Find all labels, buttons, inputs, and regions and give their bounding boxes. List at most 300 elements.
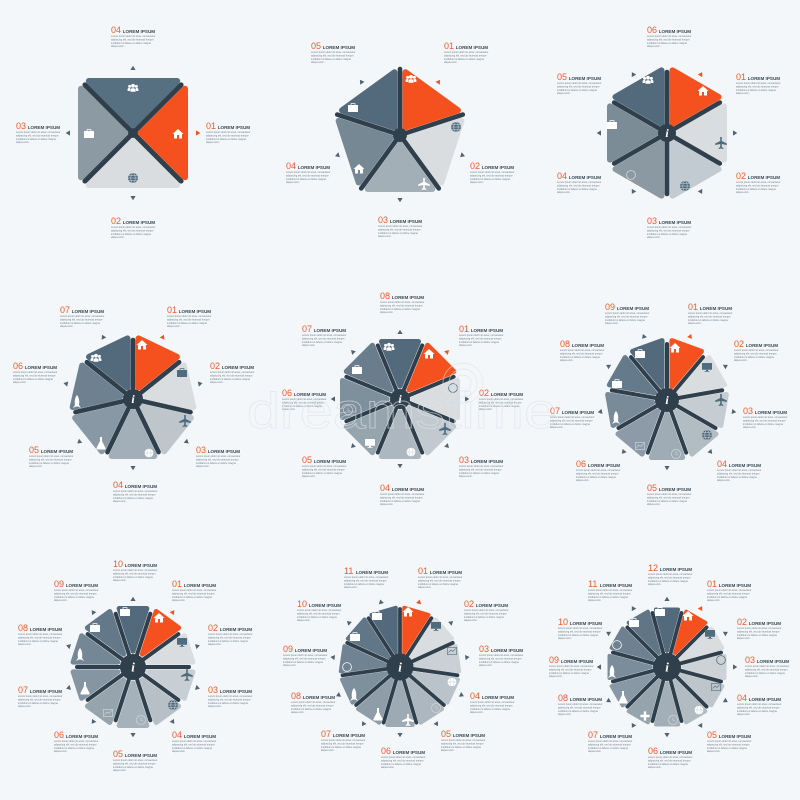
label 03: adipiscing elit, sed do eiusmod tempor [378,228,421,231]
icon: briefcase [177,369,187,377]
label 04: Lorem ipsum dolor sit amet, consectetur [717,469,762,472]
label 03: 03 [196,445,206,455]
label 05: aliqua enim. [707,750,721,753]
icon: people [128,84,138,92]
label 08 [558,693,603,716]
label 01: LOREM IPSUM [184,583,216,588]
label 01: incididunt ut labore et dolore magna [707,596,747,599]
label 05: aliqua enim. [557,92,571,95]
icon: ring [449,384,457,392]
label 06 [576,459,621,482]
label 06: 06 [54,730,64,740]
label 04: incididunt ut labore et dolore magna [113,497,153,500]
label 05: Lorem ipsum dolor sit amet, consectetur [113,759,158,762]
label 07: incididunt ut labore et dolore magna [588,747,628,750]
icon: rocket [73,395,81,408]
icon: home [354,164,364,174]
label 08: incididunt ut labore et dolore magna [380,308,420,311]
label 05: incididunt ut labore et dolore magna [302,472,342,475]
label 04: 04 [470,691,480,701]
label 06: Lorem ipsum dolor sit amet, consectetur [54,740,99,743]
label 09: incididunt ut labore et dolore magna [54,596,94,599]
label 03: LOREM IPSUM [755,410,787,415]
label 01: Lorem ipsum dolor sit amet, consectetur [418,576,463,579]
label 03 [208,685,253,708]
label 05: Lorem ipsum dolor sit amet, consectetur [707,740,752,743]
chart: 12 segments [549,563,790,769]
label 02: adipiscing elit, sed do eiusmod tempor [210,374,253,377]
label 07: aliqua enim. [18,705,32,708]
label 05: incididunt ut labore et dolore magna [647,500,687,503]
diagram: heptagon [63,334,203,470]
label 04: LOREM IPSUM [392,487,424,492]
label 02: 02 [737,617,747,627]
label 07: aliqua enim. [321,749,335,752]
label 11: LOREM IPSUM [356,570,388,575]
label 03: LOREM IPSUM [28,125,60,130]
label 11: aliqua enim. [344,586,358,589]
label 09: aliqua enim. [283,664,297,667]
icon: briefcase [348,104,358,112]
label 02: LOREM IPSUM [491,392,523,397]
label 04 [286,161,331,184]
label 12: LOREM IPSUM [660,567,692,572]
label 10 [113,559,158,582]
label 03: 03 [745,655,755,665]
label 07: Lorem ipsum dolor sit amet, consectetur [321,739,366,742]
label 03: aliqua enim. [16,141,30,144]
label 02: incididunt ut labore et dolore magna [464,616,504,619]
label 04: adipiscing elit, sed do eiusmod tempor [557,184,600,187]
label 11 [588,579,633,602]
label 08: 08 [291,691,301,701]
arrows [65,597,201,737]
label 03: incididunt ut labore et dolore magna [459,472,499,475]
label 11: incididunt ut labore et dolore magna [344,583,384,586]
label 06: incididunt ut labore et dolore magna [576,476,616,479]
label 11: adipiscing elit, sed do eiusmod tempor [588,592,631,595]
label 10: 10 [558,617,568,627]
label 07 [321,729,366,752]
label 02: LOREM IPSUM [220,627,252,632]
label 02: 02 [208,623,218,633]
chart: 11 segments [283,566,524,769]
icon: clock [431,703,441,713]
spokes and hub [614,72,720,194]
label 08: incididunt ut labore et dolore magna [560,356,600,359]
label 06: aliqua enim. [54,750,68,753]
label 06: Lorem ipsum dolor sit amet, consectetur [647,35,692,38]
label 02: aliqua enim. [737,637,751,640]
label 09: LOREM IPSUM [295,648,327,653]
label 01: adipiscing elit, sed do eiusmod tempor [459,337,502,340]
label 03 [647,216,692,239]
label 04: incididunt ut labore et dolore magna [557,188,597,191]
label 10: aliqua enim. [113,579,127,582]
label 01 [444,41,489,64]
label 03 [16,121,61,144]
label 08: adipiscing elit, sed do eiusmod tempor [291,704,334,707]
icon: briefcase [612,380,622,388]
label 04: incididunt ut labore et dolore magna [172,747,212,750]
label 08: aliqua enim. [380,311,394,314]
label 02: Lorem ipsum dolor sit amet, consectetur [111,226,156,229]
label 04: aliqua enim. [380,503,394,506]
segments [342,342,458,456]
label 02 [470,161,515,184]
label 09: LOREM IPSUM [66,583,98,588]
label 05: Lorem ipsum dolor sit amet, consectetur [302,465,347,468]
label 06: LOREM IPSUM [660,750,692,755]
label 07: 07 [588,730,598,740]
label 01: aliqua enim. [459,344,473,347]
label 09: 09 [549,655,559,665]
label 04: adipiscing elit, sed do eiusmod tempor [470,704,513,707]
label 05: 05 [302,455,312,465]
icon: briefcase [90,624,100,632]
label 11: aliqua enim. [588,599,602,602]
label 03: aliqua enim. [743,426,757,429]
label 03: adipiscing elit, sed do eiusmod tempor [208,698,251,701]
label 05: 05 [441,729,451,739]
label 07: LOREM IPSUM [72,309,104,314]
label 08: Lorem ipsum dolor sit amet, consectetur [291,701,336,704]
label 08: 08 [558,693,568,703]
label 05: aliqua enim. [113,769,127,772]
label 05: aliqua enim. [302,475,316,478]
label 01 [459,324,504,347]
label 07: 07 [321,729,331,739]
label 02: incididunt ut labore et dolore magna [737,634,777,637]
label 05: incididunt ut labore et dolore magna [557,89,597,92]
label 03: aliqua enim. [208,705,222,708]
spokes and hub [612,344,722,453]
label 10 [297,599,342,622]
label 07: 07 [550,406,560,416]
label 02: Lorem ipsum dolor sit amet, consectetur [464,609,509,612]
label 05: 05 [557,72,567,82]
label 05: adipiscing elit, sed do eiusmod tempor [647,496,690,499]
icon: home [402,607,414,616]
label 02: aliqua enim. [111,236,125,239]
label 01: incididunt ut labore et dolore magna [688,319,728,322]
label 02: adipiscing elit, sed do eiusmod tempor [470,174,513,177]
label 02: 02 [464,599,474,609]
label 03: incididunt ut labore et dolore magna [196,462,236,465]
label 12 [648,563,693,586]
label 09: LOREM IPSUM [561,659,593,664]
label 07: Lorem ipsum dolor sit amet, consectetur [550,416,595,419]
label 05 [441,729,486,752]
label 02 [736,171,781,194]
label 02: Lorem ipsum dolor sit amet, consectetur [470,171,515,174]
label 03: aliqua enim. [647,236,661,239]
diagram: octagon [331,330,469,468]
arrows [330,599,470,737]
label 04: adipiscing elit, sed do eiusmod tempor [172,743,215,746]
label 05: Lorem ipsum dolor sit amet, consectetur [29,455,74,458]
icon: globe [168,700,178,710]
label 03: 03 [647,216,657,226]
icon: chart [711,683,721,691]
label 03: 03 [459,455,469,465]
chart: 6 segments [557,25,781,239]
label 07 [550,406,595,429]
label 04: 04 [286,161,296,171]
label 02 [479,388,524,411]
icon: people [406,75,416,83]
label 08: adipiscing elit, sed do eiusmod tempor [380,304,423,307]
label 02: Lorem ipsum dolor sit amet, consectetur [210,371,255,374]
label 07: LOREM IPSUM [562,410,594,415]
label 04 [113,480,158,503]
icon: briefcase [352,366,362,374]
label 02: aliqua enim. [734,359,748,362]
label 07: LOREM IPSUM [314,328,346,333]
icon: clock [343,405,353,415]
label 09: incididunt ut labore et dolore magna [283,661,323,664]
label 06: adipiscing elit, sed do eiusmod tempor [13,374,56,377]
label 01: adipiscing elit, sed do eiusmod tempor [688,315,731,318]
arrows [597,597,737,737]
label 07: Lorem ipsum dolor sit amet, consectetur [60,315,105,318]
label 05: 05 [29,445,39,455]
label 01: Lorem ipsum dolor sit amet, consectetur [206,131,251,134]
label 02 [208,623,253,646]
label 04: LOREM IPSUM [482,695,514,700]
label 11: Lorem ipsum dolor sit amet, consectetur [588,589,633,592]
arrows [63,334,203,470]
label 07: aliqua enim. [60,325,74,328]
label 03: incididunt ut labore et dolore magna [479,661,519,664]
label 01: incididunt ut labore et dolore magna [172,596,212,599]
label 04: Lorem ipsum dolor sit amet, consectetur [286,171,331,174]
label 01: incididunt ut labore et dolore magna [459,341,499,344]
label 03: adipiscing elit, sed do eiusmod tempor [745,668,788,671]
label 01: adipiscing elit, sed do eiusmod tempor [172,592,215,595]
label 10: adipiscing elit, sed do eiusmod tempor [113,572,156,575]
label 09: 09 [54,579,64,589]
label 03 [479,644,524,667]
label 02 [210,361,255,384]
label 06: 06 [576,459,586,469]
label 03: aliqua enim. [745,675,759,678]
spokes and hub [343,609,457,723]
icon: chart [103,709,113,717]
label 10: aliqua enim. [558,637,572,640]
label 09: incididunt ut labore et dolore magna [605,319,645,322]
label 02: Lorem ipsum dolor sit amet, consectetur [737,627,782,630]
label 02: aliqua enim. [470,181,484,184]
label 06: LOREM IPSUM [588,463,620,468]
icon: globe [680,181,690,191]
label 07: incididunt ut labore et dolore magna [550,423,590,426]
label 04: 04 [113,480,123,490]
icon: people [384,343,394,351]
label 12: aliqua enim. [648,583,662,586]
chart: 9 segments [550,302,788,506]
label 04: incididunt ut labore et dolore magna [111,42,151,45]
label 04: Lorem ipsum dolor sit amet, consectetur [113,490,158,493]
label 11: adipiscing elit, sed do eiusmod tempor [344,579,387,582]
label 04 [380,483,425,506]
label 02: 02 [470,161,480,171]
segments [341,608,459,725]
segments [610,610,724,724]
diagram: hendecagon [330,599,470,737]
icon: flask [80,682,90,695]
label 01 [707,579,752,602]
label 09: Lorem ipsum dolor sit amet, consectetur [549,665,594,668]
label 12: 12 [648,563,658,573]
icon: rocket [76,648,84,661]
label 01: LOREM IPSUM [700,306,732,311]
diagram: hexagon [597,70,737,196]
label 05: adipiscing elit, sed do eiusmod tempor [311,54,354,57]
label 06: adipiscing elit, sed do eiusmod tempor [576,472,619,475]
label 10: 10 [113,559,123,569]
label 05: 05 [113,749,123,759]
label 07: adipiscing elit, sed do eiusmod tempor [588,743,631,746]
label 03: LOREM IPSUM [390,219,422,224]
label 04: incididunt ut labore et dolore magna [470,708,510,711]
label 03: incididunt ut labore et dolore magna [745,672,785,675]
label 11: Lorem ipsum dolor sit amet, consectetur [344,576,389,579]
spokes and hub [77,614,189,720]
label 02: aliqua enim. [210,381,224,384]
label 05: aliqua enim. [311,61,325,64]
label 09: incididunt ut labore et dolore magna [549,672,589,675]
label 07: adipiscing elit, sed do eiusmod tempor [302,337,345,340]
label 02: adipiscing elit, sed do eiusmod tempor [111,229,154,232]
label 05: incididunt ut labore et dolore magna [441,746,481,749]
label 04: adipiscing elit, sed do eiusmod tempor [286,174,329,177]
label 10: adipiscing elit, sed do eiusmod tempor [558,630,601,633]
label 05: adipiscing elit, sed do eiusmod tempor [302,468,345,471]
label 01: Lorem ipsum dolor sit amet, consectetur [688,312,733,315]
label 05: adipiscing elit, sed do eiusmod tempor [441,742,484,745]
segments [610,70,724,196]
label 01: 01 [172,579,182,589]
label 10: LOREM IPSUM [125,563,157,568]
label 03: 03 [378,215,388,225]
hub letter i: i [131,660,135,674]
label 08 [291,691,336,714]
label 04: Lorem ipsum dolor sit amet, consectetur [111,35,156,38]
label 04: Lorem ipsum dolor sit amet, consectetur [380,493,425,496]
diagram: nonagon [597,333,737,470]
label 06: LOREM IPSUM [294,392,326,397]
label 07: incididunt ut labore et dolore magna [18,702,58,705]
icon: globe [145,449,153,457]
label 01: 01 [707,579,717,589]
label 03: incididunt ut labore et dolore magna [743,423,783,426]
watermark: dreamstime [247,383,557,439]
label 09: Lorem ipsum dolor sit amet, consectetur [283,654,328,657]
label 04: incididunt ut labore et dolore magna [380,500,420,503]
icon: rocket [350,688,358,701]
label 03: LOREM IPSUM [471,459,503,464]
label 03: aliqua enim. [196,465,210,468]
label 05 [302,455,347,478]
diagram: 4 segment square [66,66,200,200]
label 07: LOREM IPSUM [600,734,632,739]
label 05 [557,72,602,95]
label 01: adipiscing elit, sed do eiusmod tempor [444,54,487,57]
label 05: adipiscing elit, sed do eiusmod tempor [113,762,156,765]
label 01: aliqua enim. [167,325,181,328]
icon: chart [635,442,645,450]
icon: globe [702,430,712,440]
label 02: aliqua enim. [736,191,750,194]
icon: ring [343,663,351,671]
label 06: aliqua enim. [648,766,662,769]
hub letter i: i [398,392,402,406]
label 10: incididunt ut labore et dolore magna [297,616,337,619]
label 04 [470,691,515,714]
icon: home [682,611,694,620]
label 09: aliqua enim. [605,322,619,325]
label 04: Lorem ipsum dolor sit amet, consectetur [557,181,602,184]
label 02: Lorem ipsum dolor sit amet, consectetur [736,181,781,184]
icon: plane [181,669,193,681]
label 07 [18,685,63,708]
label 01: LOREM IPSUM [748,76,780,81]
label 01: aliqua enim. [444,61,458,64]
label 06: Lorem ipsum dolor sit amet, consectetur [648,756,693,759]
label 04: 04 [172,730,182,740]
label 04: LOREM IPSUM [729,463,761,468]
label 02: incididunt ut labore et dolore magna [479,405,519,408]
label 11: 11 [344,566,353,576]
label 01: adipiscing elit, sed do eiusmod tempor [707,592,750,595]
label 02: adipiscing elit, sed do eiusmod tempor [479,401,522,404]
label 08: incididunt ut labore et dolore magna [18,640,58,643]
label 07: LOREM IPSUM [333,733,365,738]
label 04: 04 [557,171,567,181]
label 04: aliqua enim. [717,479,731,482]
label 03 [743,406,788,429]
label 01 [736,72,781,95]
label 05: LOREM IPSUM [659,487,691,492]
label 09: 09 [605,302,615,312]
label 06: incididunt ut labore et dolore magna [381,763,421,766]
label 02 [464,599,509,622]
label 03: LOREM IPSUM [757,659,789,664]
label 08: adipiscing elit, sed do eiusmod tempor [560,352,603,355]
label 05 [113,749,158,772]
label 09: LOREM IPSUM [617,306,649,311]
label 02: adipiscing elit, sed do eiusmod tempor [208,636,251,639]
label 04: adipiscing elit, sed do eiusmod tempor [113,493,156,496]
label 04: aliqua enim. [113,500,127,503]
label 09 [549,655,594,678]
label 04: Lorem ipsum dolor sit amet, consectetur [172,740,217,743]
icon: briefcase [629,619,639,627]
icon: clock [668,715,678,725]
label 06: 06 [282,388,292,398]
label 03: adipiscing elit, sed do eiusmod tempor [647,229,690,232]
label 04: 04 [737,693,747,703]
label 06: incididunt ut labore et dolore magna [648,763,688,766]
label 09 [283,644,328,667]
label 08: adipiscing elit, sed do eiusmod tempor [558,706,601,709]
label 02: adipiscing elit, sed do eiusmod tempor [736,184,779,187]
label 04: aliqua enim. [286,181,300,184]
spokes and hub [346,345,454,453]
label 07: Lorem ipsum dolor sit amet, consectetur [18,695,63,698]
icon: home [136,340,148,350]
